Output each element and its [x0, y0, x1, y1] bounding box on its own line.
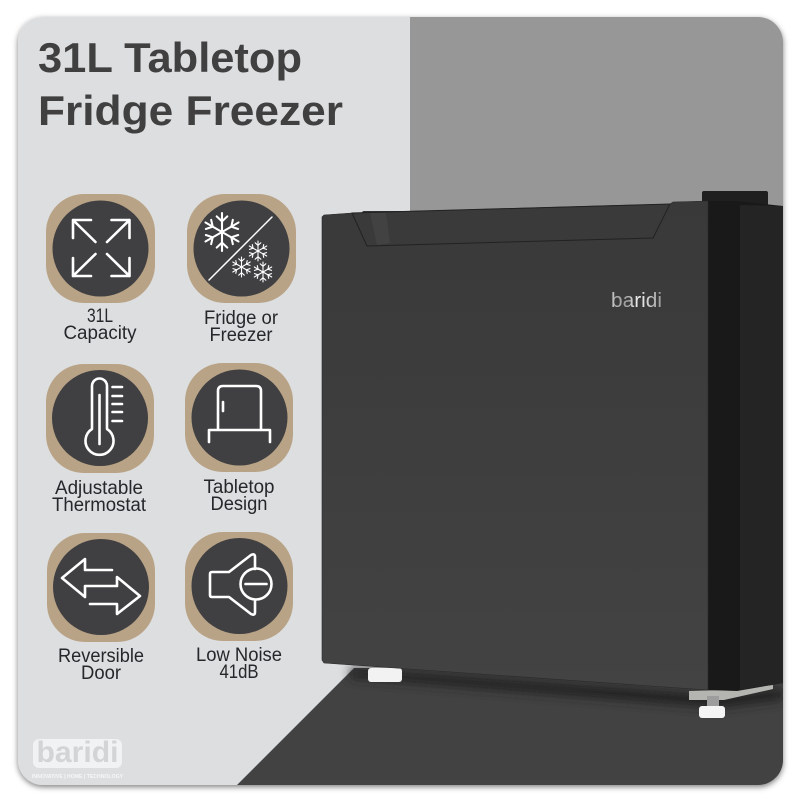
hinge and door handle top [362, 191, 768, 216]
feature: tabletop design: Tabletop [204, 477, 274, 498]
feature: adjustable thermostat: Thermostat [52, 495, 147, 516]
feature: tabletop design: Design [210, 494, 268, 515]
fridge side [708, 201, 783, 691]
brand logo: baridi [36, 736, 118, 769]
feature: low noise 41dB: 41dB [220, 662, 258, 683]
feature: low noise 41dB [185, 532, 293, 683]
fridge door front [322, 201, 708, 690]
feature: reversible door: Reversible [58, 646, 144, 667]
feature: 31L capacity [46, 194, 155, 344]
brand logo: INNOVATIVE | HOME | TECHNOLOGY [32, 774, 124, 780]
feature: 31L capacity: 31L [87, 306, 113, 327]
feature: fridge or freezer [187, 194, 296, 346]
feature: 31L capacity: Capacity [64, 323, 137, 344]
title: Fridge Freezer [38, 87, 343, 134]
feature: fridge or freezer: Fridge or [204, 308, 279, 329]
title [38, 34, 343, 134]
fridge brand badge: baridi [611, 290, 662, 312]
fridge feet and bracket [368, 668, 773, 718]
feature: reversible door [47, 533, 155, 684]
feature: reversible door: Door [81, 663, 122, 684]
brand logo [32, 736, 124, 780]
door handle recess [352, 204, 670, 246]
feature: adjustable thermostat [46, 364, 154, 516]
feature: tabletop design [185, 363, 293, 515]
feature: fridge or freezer: Freezer [210, 325, 273, 346]
title: 31L Tabletop [38, 34, 302, 81]
product: fridge [322, 191, 783, 718]
feature: adjustable thermostat: Adjustable [55, 478, 143, 499]
feature: low noise 41dB: Low Noise [196, 645, 282, 666]
